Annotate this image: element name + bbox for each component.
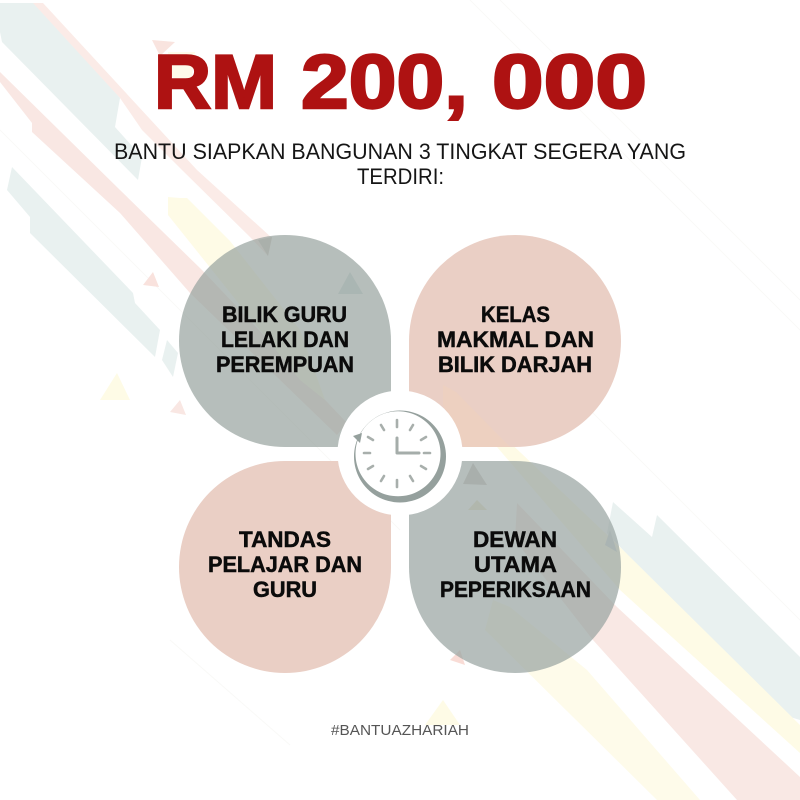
label: tandas	[208, 527, 362, 602]
label: bilik guru: LELAKI DAN	[221, 327, 349, 352]
clock arrowhead	[353, 433, 362, 443]
label: dewan utama: PEPERIKSAAN	[440, 577, 591, 602]
label: dewan utama: DEWAN	[473, 527, 557, 552]
label: kelas makmal: BILIK DARJAH	[438, 352, 592, 377]
label: tandas: PELAJAR DAN	[208, 552, 362, 577]
subtitle	[114, 139, 686, 189]
label: tandas: TANDAS	[239, 527, 331, 552]
clock ring gap	[350, 420, 368, 438]
panel: tandas	[179, 461, 391, 673]
panel: dewan utama	[409, 461, 621, 673]
panel: kelas makmal	[409, 235, 621, 447]
label: dewan utama	[440, 527, 591, 602]
icon: clock	[338, 390, 462, 516]
label: kelas makmal: KELAS	[481, 302, 550, 327]
label: bilik guru: BILIK GURU	[222, 302, 347, 327]
clock ticks	[364, 420, 430, 487]
title	[154, 40, 647, 125]
clock hands	[397, 438, 419, 453]
hashtag: #BANTUAZHARIAH	[331, 722, 469, 739]
subtitle: TERDIRI:	[357, 164, 444, 189]
title: 000	[492, 40, 647, 125]
label: kelas makmal	[437, 302, 594, 377]
title: 200,	[301, 40, 468, 125]
subtitle: BANTU SIAPKAN BANGUNAN 3 TINGKAT SEGERA YANG	[114, 139, 686, 164]
clock swoosh ring	[354, 410, 446, 502]
panel: bilik guru	[179, 235, 391, 447]
label: tandas: GURU	[253, 577, 317, 602]
label: kelas makmal: MAKMAL DAN	[437, 327, 594, 352]
title: RM	[154, 40, 277, 125]
label: bilik guru	[216, 302, 354, 377]
label: bilik guru: PEREMPUAN	[216, 352, 354, 377]
label: dewan utama: UTAMA	[474, 552, 557, 577]
